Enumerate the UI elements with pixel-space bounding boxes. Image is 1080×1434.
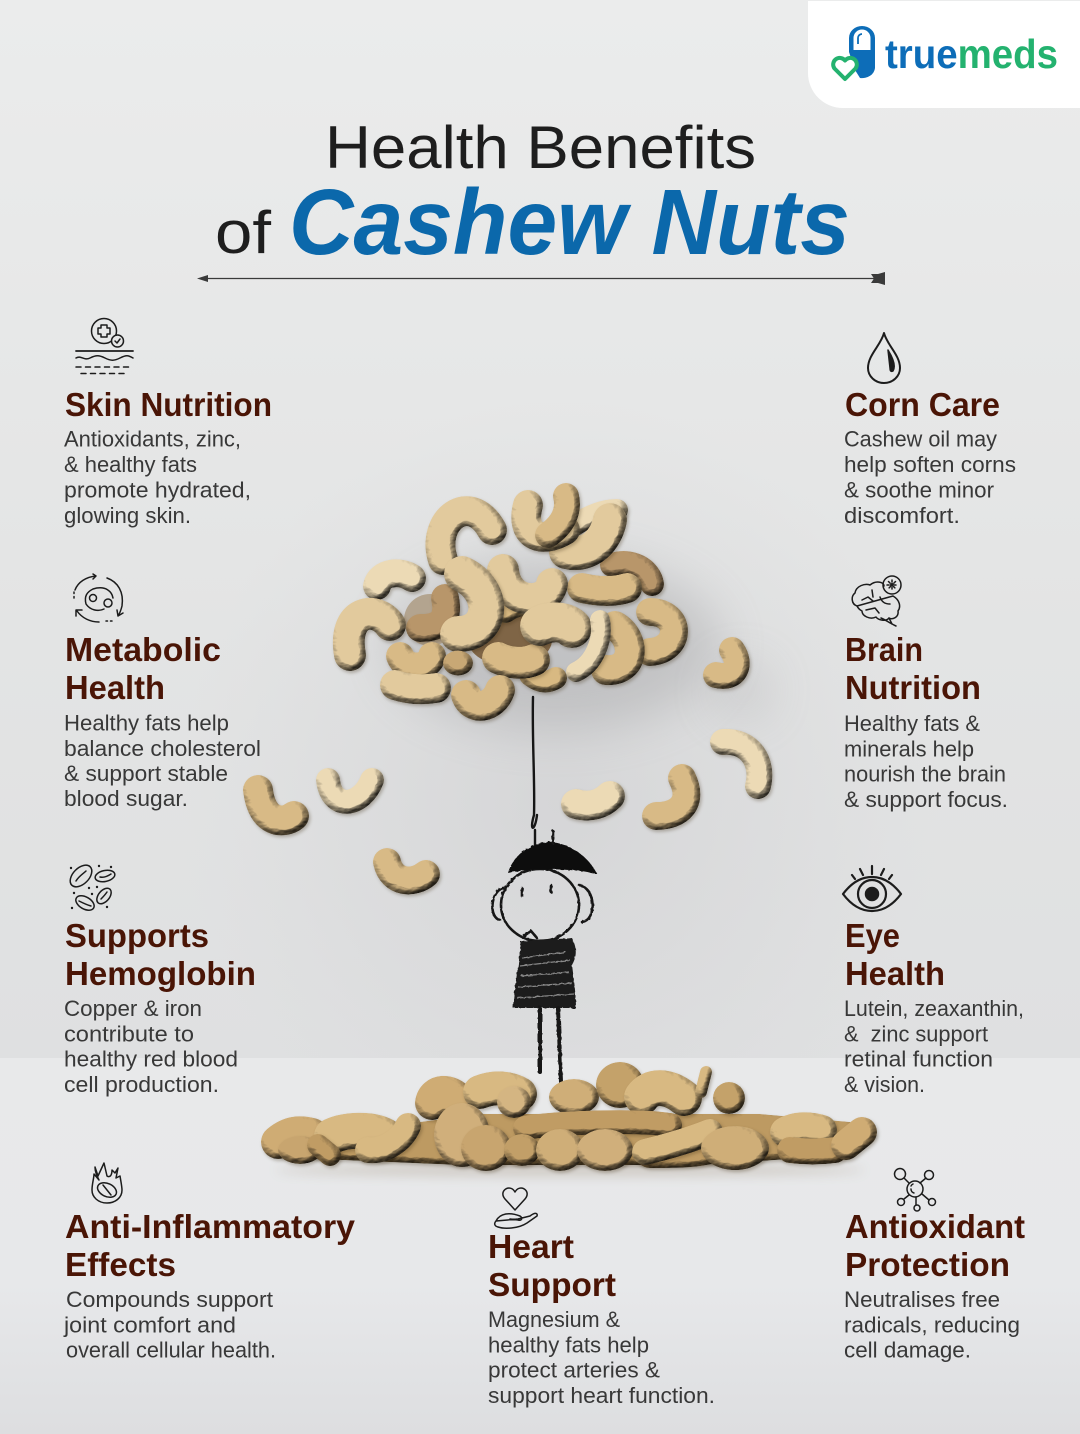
description: Healthy fats & bbox=[844, 711, 980, 736]
title bbox=[215, 114, 850, 274]
title arrow divider bbox=[197, 272, 885, 285]
heading: Anti-Inflammatory bbox=[65, 1208, 356, 1245]
description: discomfort. bbox=[844, 503, 960, 528]
benefit: Heart Support: Support bbox=[488, 1266, 616, 1303]
description: overall cellular health. bbox=[66, 1338, 276, 1362]
description: support heart function. bbox=[488, 1383, 715, 1408]
description: Healthy fats help bbox=[64, 710, 229, 736]
description: Magnesium & bbox=[488, 1307, 620, 1332]
icon: molecule bbox=[894, 1168, 936, 1211]
cashew cloud bbox=[349, 496, 674, 706]
title: Health Benefits bbox=[325, 114, 756, 181]
description: & healthy fats bbox=[64, 452, 197, 477]
benefit: Antioxidant Protection: Protection bbox=[845, 1246, 1010, 1283]
description bbox=[64, 710, 261, 811]
figure beret bbox=[508, 842, 597, 874]
icon: eye bbox=[843, 866, 901, 911]
description: help soften corns bbox=[844, 452, 1016, 477]
background wall bbox=[0, 0, 1080, 1060]
heading: Skin Nutrition bbox=[65, 386, 272, 423]
heading: Antioxidant bbox=[845, 1208, 1025, 1245]
description bbox=[844, 996, 1024, 1097]
figure body bbox=[513, 938, 576, 1008]
description bbox=[63, 1287, 276, 1362]
figure legs bbox=[540, 1008, 561, 1082]
description: healthy red blood bbox=[64, 1046, 238, 1072]
description: healthy fats help bbox=[488, 1332, 649, 1358]
description: Copper & iron bbox=[64, 996, 202, 1021]
heading: Corn Care bbox=[845, 386, 1000, 423]
description: Cashew oil may bbox=[844, 426, 997, 452]
description: cell damage. bbox=[844, 1338, 971, 1362]
description bbox=[64, 426, 251, 528]
figure scribble texture bbox=[517, 952, 574, 998]
description: cell production. bbox=[64, 1072, 219, 1097]
description: radicals, reducing bbox=[844, 1312, 1020, 1338]
benefit: Heart Support bbox=[488, 1188, 715, 1408]
heading: Heart bbox=[488, 1228, 574, 1265]
description: glowing skin. bbox=[64, 503, 191, 528]
description: & support stable bbox=[64, 761, 228, 786]
description: nourish the brain bbox=[844, 762, 1006, 786]
heading: Supports bbox=[65, 917, 209, 954]
benefit: Eye Health bbox=[843, 866, 1024, 1097]
description bbox=[488, 1307, 715, 1408]
logo panel bbox=[808, 1, 1080, 108]
benefit: Brain Nutrition bbox=[844, 576, 1008, 812]
cashew pile bbox=[270, 1062, 876, 1175]
benefit: Metabolic Health bbox=[64, 574, 261, 811]
benefit: Skin Nutrition bbox=[64, 318, 272, 528]
shadow under cashew cloud bbox=[390, 560, 768, 730]
benefit: Antioxidant Protection bbox=[844, 1168, 1025, 1362]
description: protect arteries & bbox=[488, 1358, 660, 1382]
description: & zinc support bbox=[844, 1022, 988, 1046]
description: promote hydrated, bbox=[64, 478, 251, 502]
logo icon: capsule and heart bbox=[833, 26, 875, 79]
icon: red blood cells bbox=[66, 861, 116, 913]
figure head and ears bbox=[492, 869, 593, 941]
heading: Brain bbox=[845, 631, 923, 668]
benefit: Anti-Inflammatory Effects bbox=[63, 1163, 356, 1362]
benefit: Supports Hemoglobin bbox=[64, 861, 256, 1097]
description: joint comfort and bbox=[63, 1312, 236, 1338]
table surface bbox=[0, 1058, 1080, 1434]
soft central shading bbox=[180, 400, 940, 1200]
benefit: Supports Hemoglobin: Hemoglobin bbox=[65, 955, 256, 992]
description: Neutralises free bbox=[844, 1287, 1000, 1312]
heading: Eye bbox=[845, 917, 900, 954]
stick figure bbox=[492, 831, 597, 1082]
icon: oil drop bbox=[868, 333, 900, 383]
description: & soothe minor bbox=[844, 478, 994, 502]
description bbox=[844, 426, 1016, 528]
description: balance cholesterol bbox=[64, 736, 261, 761]
description: retinal function bbox=[844, 1046, 993, 1072]
icon: metabolic cycle bbox=[74, 574, 123, 622]
heading: Metabolic bbox=[65, 631, 221, 668]
icon: skin with medical cross bbox=[76, 318, 133, 374]
description: & support focus. bbox=[844, 787, 1008, 812]
logo wordmark: truemeds bbox=[885, 31, 1058, 77]
description: minerals help bbox=[844, 736, 974, 762]
benefit: Metabolic Health: Health bbox=[65, 669, 165, 706]
loose cashews bbox=[258, 650, 759, 880]
description: contribute to bbox=[64, 1022, 194, 1046]
description bbox=[844, 711, 1008, 812]
title: of bbox=[215, 199, 271, 266]
description bbox=[64, 996, 238, 1097]
icon: flame with capsule bbox=[92, 1163, 122, 1203]
benefit: Brain Nutrition: Nutrition bbox=[845, 669, 981, 706]
description bbox=[844, 1287, 1020, 1362]
description: Antioxidants, zinc, bbox=[64, 426, 241, 452]
description: & vision. bbox=[844, 1072, 925, 1097]
benefit: Eye Health: Health bbox=[845, 955, 945, 992]
icon: hand holding heart bbox=[495, 1188, 537, 1228]
icon: brain bbox=[852, 576, 901, 626]
hanging line bbox=[532, 697, 537, 848]
title: Cashew Nuts bbox=[289, 170, 850, 274]
description: Compounds support bbox=[66, 1287, 273, 1312]
benefit: Anti-Inflammatory Effects: Effects bbox=[65, 1246, 176, 1283]
description: blood sugar. bbox=[64, 786, 188, 811]
description: Lutein, zeaxanthin, bbox=[844, 996, 1024, 1021]
benefit: Corn Care bbox=[844, 333, 1016, 528]
